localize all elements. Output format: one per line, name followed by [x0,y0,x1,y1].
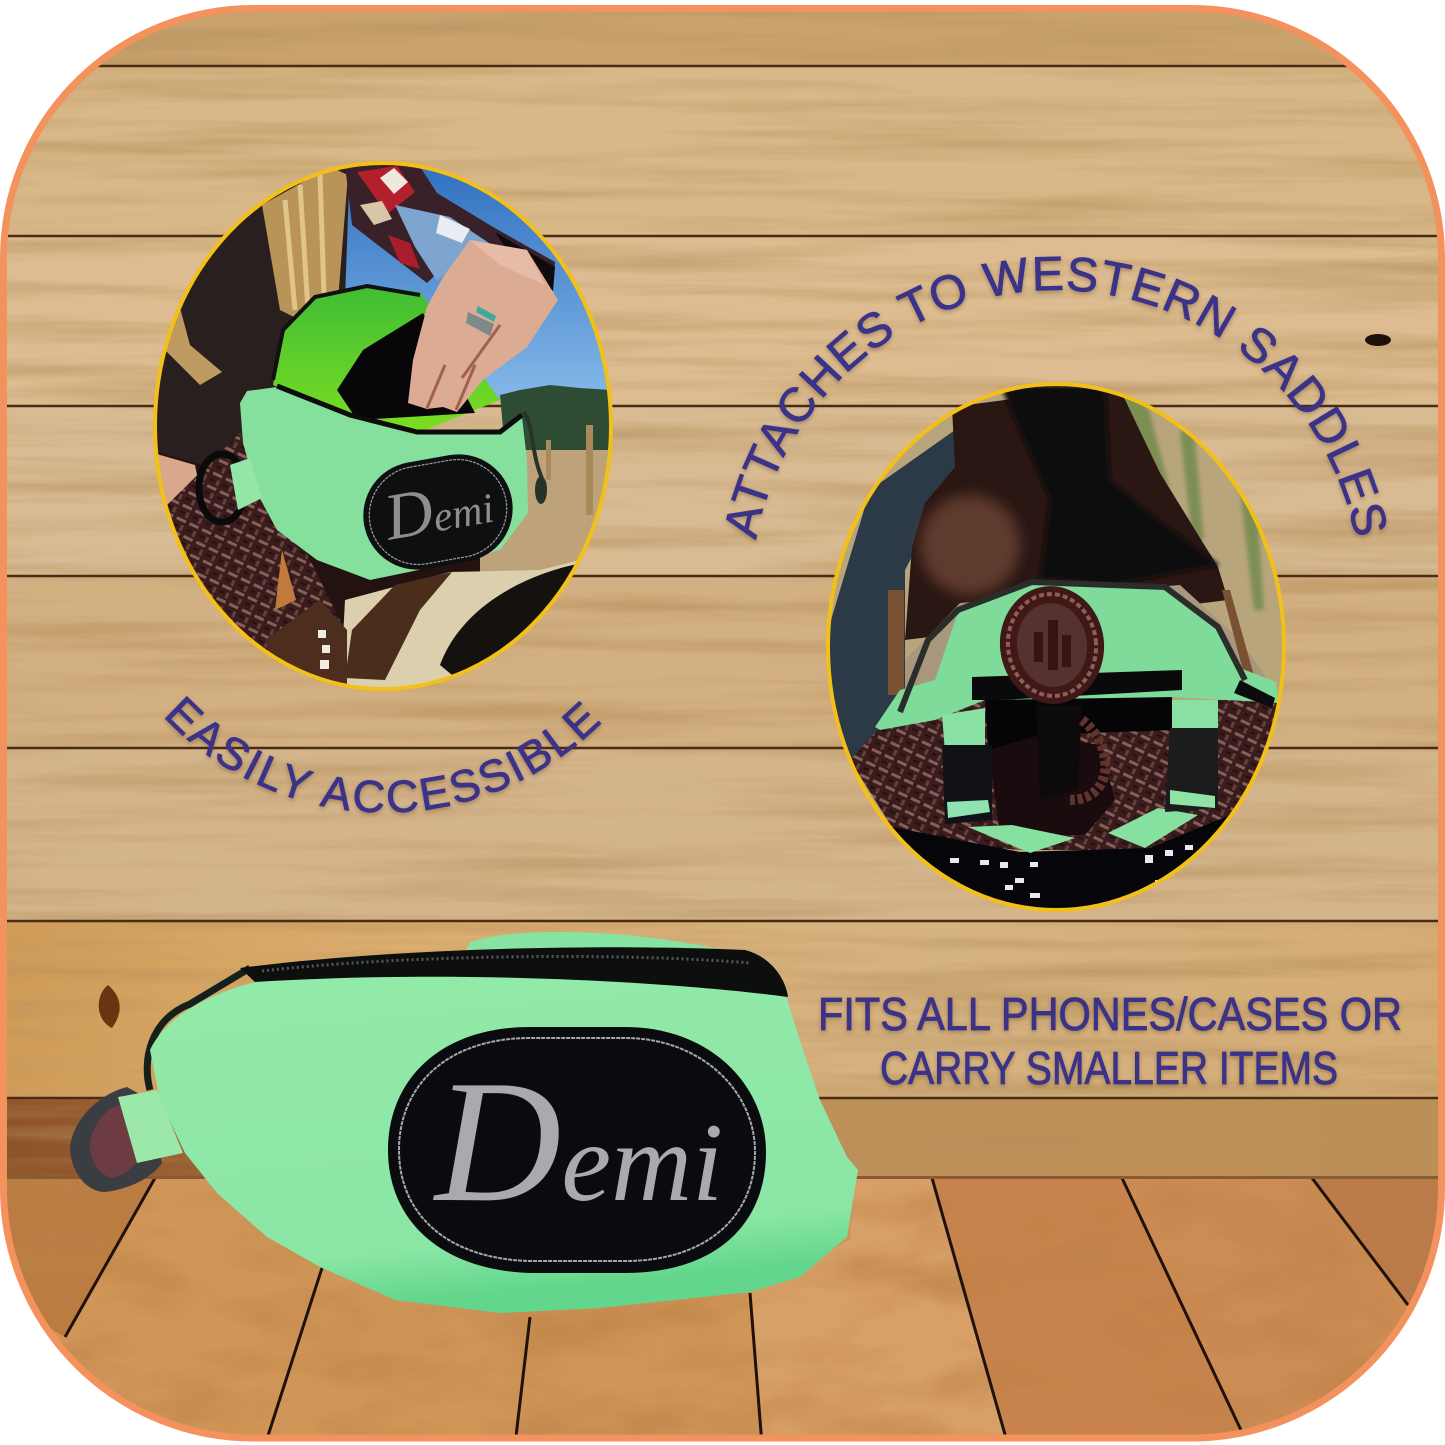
brown strap [345,572,452,680]
saddle center seat [988,735,1115,835]
yellow circle outline [155,163,611,689]
tan laces [275,550,296,610]
upper zipper [273,286,420,380]
curved caption: easily accessible: EASILY ACCESSIBLE [164,696,602,816]
horn base swell [1070,720,1105,800]
curved caption: attaches to western saddles: ATTACHES TO WESTERN SADDLES [724,256,1388,543]
back panel [450,932,760,985]
name patch [355,446,521,578]
sandy background [825,380,1295,920]
right buckle [1165,728,1218,812]
sky [345,168,607,400]
clip ring [70,1087,162,1192]
bag front zipper [972,670,1182,700]
grass streaks [1120,395,1264,610]
webbing straps [942,700,1218,752]
fence posts [546,425,593,515]
saddle black underside [830,800,1290,920]
saddle blanket [340,560,580,695]
brown straps [888,590,1258,695]
photo circle: bag on saddle horn [825,380,1295,920]
left buckle [942,745,992,824]
horse body [905,385,1228,640]
bag top [875,583,1279,730]
horse shoulder [920,495,1020,595]
bag outer zipper [900,582,1245,712]
skin at waist [158,454,197,504]
caption: fits all phones: CARRY SMALLER ITEMS [880,1042,1338,1094]
horn stem [1036,705,1082,800]
patch name: Demi [433,1044,723,1238]
main zipper [240,947,788,997]
hand [408,240,558,412]
horse mane [1000,385,1220,585]
dark shirt [150,160,350,470]
dark lower base [158,452,480,626]
dark foliage [825,430,955,770]
rings [466,312,494,336]
drawstring [524,412,545,485]
blonde hair [262,167,348,320]
saddle leather [850,700,1285,850]
d-ring and strap [199,454,262,522]
field ground [480,450,608,572]
caption: fits all phones [818,988,1402,1094]
main bag product [70,932,858,1313]
phone [337,313,475,420]
suede skirt [265,600,347,690]
floor planks [0,1176,1445,1445]
name patch [388,1027,766,1273]
zipper teeth [262,956,750,971]
black gap under bag [985,690,1172,750]
ring opening [90,1105,140,1178]
black mane [440,564,574,675]
saddle leather [168,433,342,650]
bag lining [273,285,500,440]
tooled horn cap [994,581,1110,709]
tree line [500,385,612,450]
bag body [240,387,528,580]
saddle pad [905,585,1275,690]
yellow circle outline [828,384,1284,910]
bag zipper [277,386,522,432]
side zipper [147,968,250,1090]
bag flaps [968,808,1198,853]
patterned sleeve [345,162,555,291]
patch name: Demi [378,464,498,555]
webbing strap [118,1090,183,1163]
photo circle: hand putting phone in bag [150,160,620,695]
zipper pull [1234,680,1275,708]
saddle blanket dots [950,845,1193,898]
bag body [150,976,858,1313]
